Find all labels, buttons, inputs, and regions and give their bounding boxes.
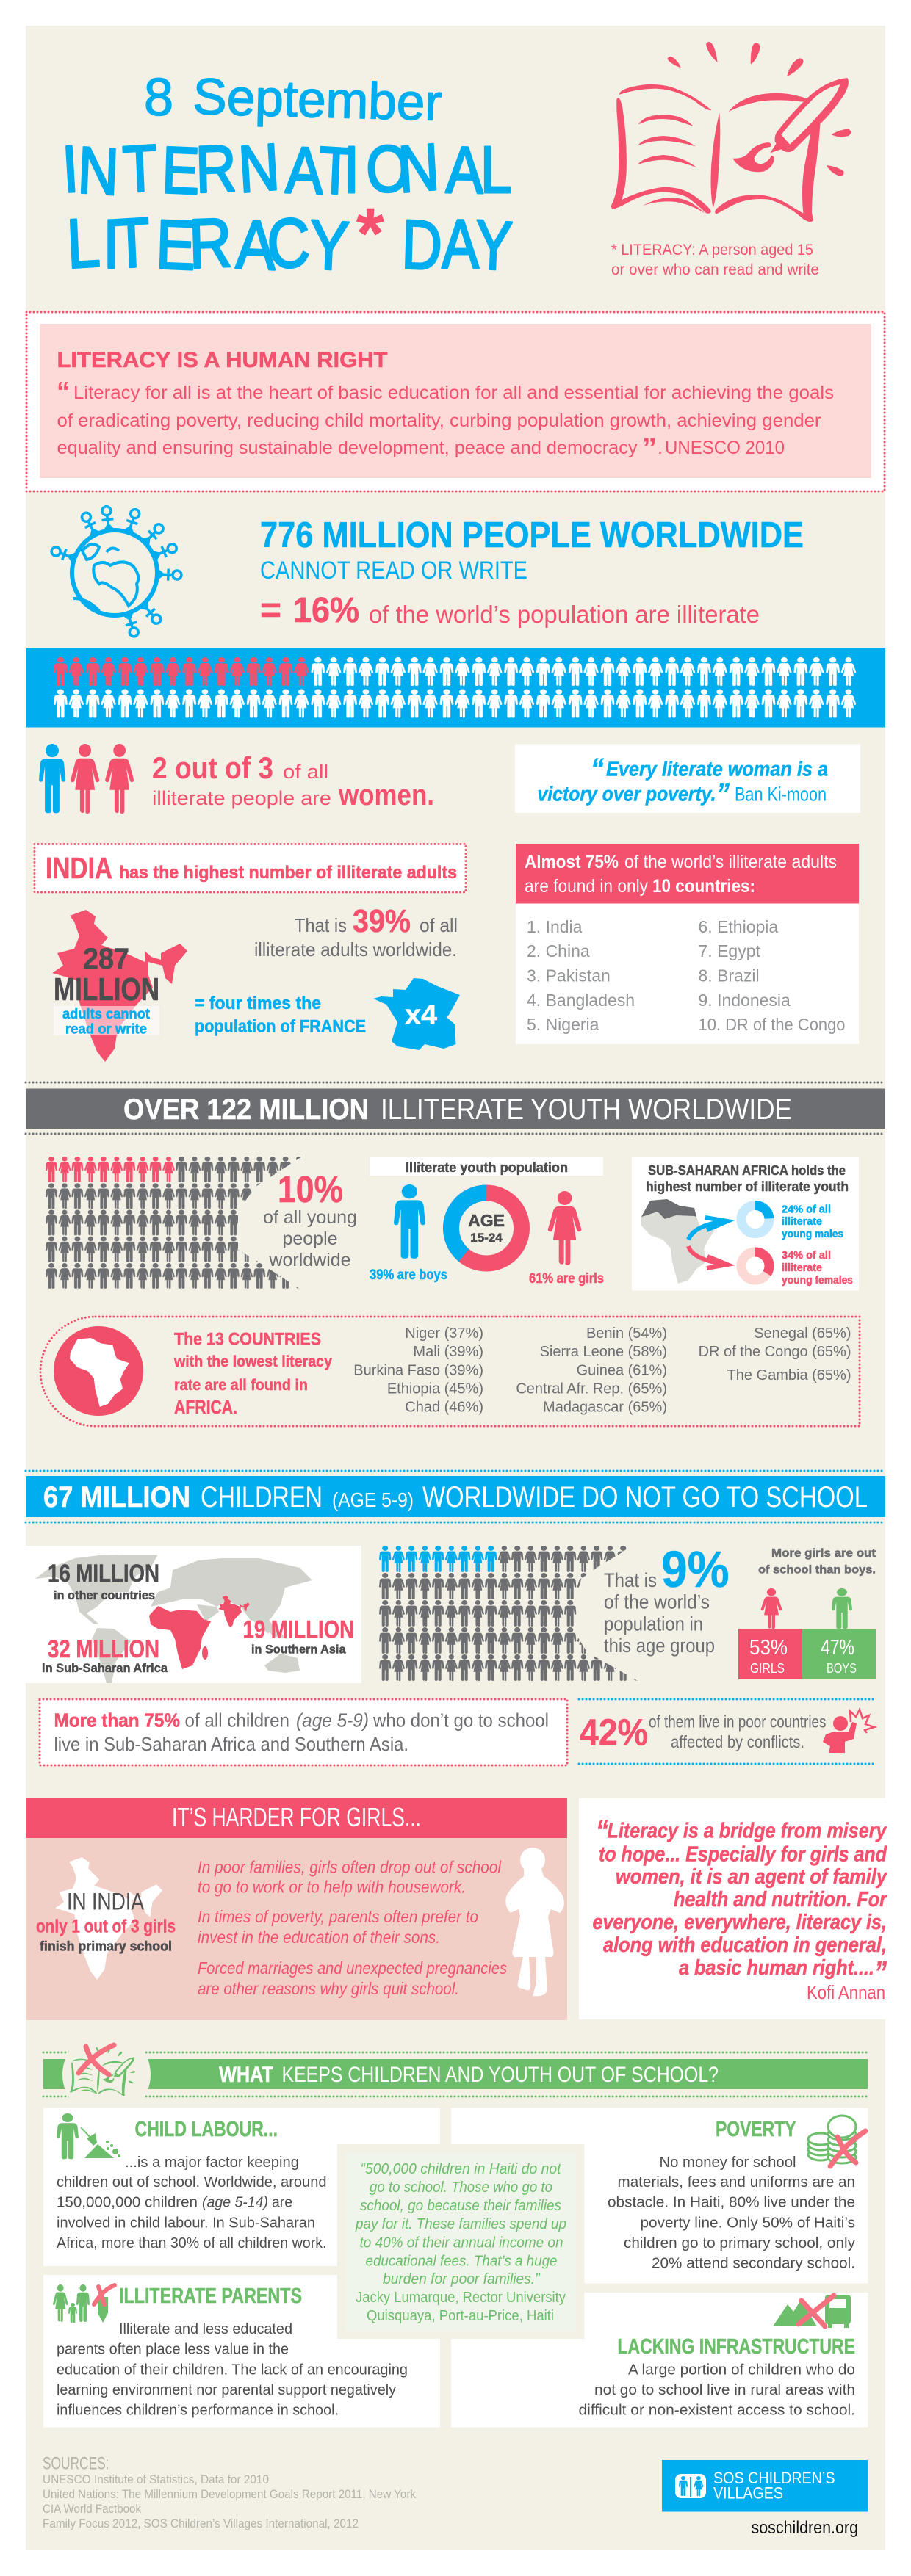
stat: 39 percent: That is <box>295 914 347 936</box>
panel heading <box>525 852 837 897</box>
sources: CIA World Factbook <box>43 2502 141 2516</box>
stat: 10 percent: of all young <box>263 1207 357 1228</box>
map labels: in Sub-Saharan Africa <box>42 1661 168 1675</box>
card text: children go to primary school, only <box>624 2235 856 2251</box>
card text: A large portion of children who do <box>628 2362 855 2378</box>
title: 8 September International Literacy Day: DAY <box>400 206 514 286</box>
card text: difficult or non-existent access to school. <box>579 2401 855 2419</box>
list: countries column 2: Sierra Leone (58%) <box>540 1344 667 1360</box>
section banner: 122 million illiterate youth <box>26 1088 885 1129</box>
callout: India highest number <box>35 844 466 892</box>
icon: boy on bar <box>832 1588 852 1629</box>
card text: poverty line. Only 50% of Haiti’s <box>641 2215 855 2231</box>
card text: 20% attend secondary school. <box>652 2254 855 2272</box>
asterisk: * <box>356 193 384 273</box>
list: countries column 3: The Gambia (65%) <box>727 1367 851 1383</box>
card: lacking infrastructure <box>451 2293 868 2428</box>
map labels: 32 MILLION <box>48 1635 159 1663</box>
list: countries column 1: Mali (39%) <box>413 1344 483 1360</box>
panel heading: Almost 75% <box>525 852 619 872</box>
panel heading: 10 countries: <box>652 876 755 897</box>
logo: SOS Children's Villages: SOS CHILDREN’S <box>713 2469 835 2487</box>
map labels <box>42 1560 354 1675</box>
callout: India highest number: INDIA <box>46 851 112 885</box>
map: India 287 million: read or write <box>65 1022 147 1037</box>
callout: more than 75 percent: who don’t go to school <box>372 1710 549 1732</box>
panel: Haiti quote: go to school. Those who go to <box>370 2179 552 2196</box>
panel: 100 people band with 16 highlighted <box>26 648 885 727</box>
map: India 287 million: adults cannot <box>62 1007 151 1022</box>
label: young males: 24% of all <box>782 1203 831 1216</box>
sources: United Nations: The Millennium Development Goals Report 2011, New York <box>43 2487 416 2501</box>
headline: 776 million: of the world’s population are illiterate <box>369 601 760 628</box>
map labels: 16 MILLION <box>48 1560 159 1588</box>
list: countries column 3: DR of the Congo (65%) <box>699 1344 851 1360</box>
country list: 3. Pakistan <box>527 966 611 985</box>
list: countries column 2: Benin (54%) <box>586 1325 667 1342</box>
icon: girl on bar <box>761 1588 782 1629</box>
panel: literacy is a human right <box>26 312 885 491</box>
UNESCO quote: . <box>658 438 663 458</box>
list: countries column 1: Niger (37%) <box>405 1325 483 1342</box>
card: illiterate parents <box>43 2275 440 2428</box>
headline: 776 million <box>260 515 804 630</box>
card text <box>57 2154 326 2251</box>
UNESCO quote: equality and ensuring sustainable development, peace and democracy <box>57 438 638 458</box>
map: France x4: x4 <box>405 1000 437 1031</box>
stat: 2 out of 3 women: 2 out of 3 <box>152 750 273 785</box>
card text: materials, fees and uniforms are an <box>617 2174 855 2190</box>
section banner: 67 million children: CHILDREN <box>201 1481 323 1513</box>
panel: Sub-Saharan Africa <box>632 1157 859 1291</box>
card text <box>579 2362 855 2419</box>
text: the 13 countries: AFRICA. <box>174 1396 237 1418</box>
callout: 42 percent conflicts: 42% <box>580 1711 648 1754</box>
panel: Haiti quote <box>337 2144 585 2339</box>
stat: 9 percent: 9% <box>661 1541 729 1598</box>
world map land <box>35 1555 312 1683</box>
stat: 39 percent: of all <box>420 914 458 936</box>
stat: four times France: population of FRANCE <box>195 1016 366 1037</box>
callout: India highest number: has the highest number of illiterate adults <box>119 863 457 883</box>
stat: 9 percent <box>604 1541 729 1657</box>
text: the 13 countries: The 13 COUNTRIES <box>174 1329 321 1350</box>
text: in India: finish primary school <box>40 1939 172 1953</box>
icon: open book with pen <box>611 42 851 222</box>
label: young males <box>782 1203 843 1240</box>
title: 8 September International Literacy Day: September <box>192 68 443 131</box>
map: India 287 million: 287 <box>83 943 129 975</box>
card text: learning environment nor parental support negatively <box>57 2381 397 2398</box>
quote: Ban Ki-moon: Every literate woman is a <box>606 758 828 780</box>
donut: 24 percent males <box>741 1206 769 1234</box>
icon: book crossed out <box>70 2045 135 2096</box>
list: countries column 1: Burkina Faso (39%) <box>353 1363 483 1379</box>
label: young females: 34% of all <box>782 1249 831 1262</box>
text: reasons: Forced marriages and unexpected pregnancies <box>198 1958 507 1978</box>
callout: more than 75 percent <box>40 1699 567 1765</box>
pictogram: 9 percent of children <box>379 1546 647 1682</box>
map: Africa in grey <box>641 1199 715 1284</box>
card: child labour <box>43 2108 440 2266</box>
headline: 776 million: = <box>260 591 281 630</box>
card text: ...is a major factor keeping <box>125 2154 299 2171</box>
text: in India: only 1 out of 3 girls <box>36 1917 176 1937</box>
country list: 7. Egypt <box>698 941 760 960</box>
text: the 13 countries: with the lowest literacy <box>173 1353 332 1370</box>
bar: boys 47 percent: BOYS <box>827 1661 857 1676</box>
map: India white <box>55 1857 162 1980</box>
stat: four times France: = four times the <box>195 994 321 1013</box>
panel: Haiti quote: pay for it. These families spend up <box>355 2216 566 2232</box>
callout: more than 75 percent: of all children <box>185 1710 289 1732</box>
quote: Ban Ki-moon: “ <box>591 753 604 785</box>
country list: 10. DR of the Congo <box>698 1015 845 1034</box>
stat: 10 percent: people <box>282 1229 338 1249</box>
panel: Haiti quote: school, go because their families <box>360 2198 561 2214</box>
sources: UNESCO Institute of Statistics, Data for 2010 <box>43 2472 269 2486</box>
stat: 39 percent: 39% <box>353 903 411 939</box>
logo: SOS Children's Villages <box>662 2460 868 2511</box>
stat: 9 percent: That is <box>604 1569 657 1591</box>
headline: 776 million: CANNOT READ OR WRITE <box>260 557 527 585</box>
section banner: what keeps children out of school: WHAT <box>219 2063 273 2087</box>
pictogram: 10 percent of youth <box>46 1157 360 1290</box>
stat: 2 out of 3 women: illiterate people are <box>152 787 331 809</box>
map: India 287 million: MILLION <box>54 972 159 1007</box>
icon: mountain and bus crossed out <box>773 2295 851 2328</box>
text: reasons: to go to work or to help with housework. <box>198 1877 466 1896</box>
callout: 42 percent conflicts: of them live in poor countries <box>649 1712 826 1732</box>
title: 8 September International Literacy Day: 8 <box>144 68 173 127</box>
section banner: what keeps children out of school: KEEPS CHILDREN AND YOUTH OUT OF SCHOOL? <box>282 2063 719 2087</box>
icon: coins crossed out <box>808 2116 865 2166</box>
panel: Kofi Annan quote: Kofi Annan <box>807 1981 885 2003</box>
icon: family with pencil <box>53 2284 115 2323</box>
heading: literacy is a human right: LITERACY IS A HUMAN RIGHT <box>57 348 388 372</box>
stat: 9 percent: population in <box>604 1613 703 1635</box>
panel heading: of the world’s illiterate adults <box>624 852 837 872</box>
label: young males: young males <box>782 1228 843 1240</box>
panel: Sub-Saharan Africa: highest number of illiterate youth <box>646 1179 849 1194</box>
icon: SOS logo <box>675 2474 706 2498</box>
text: in India <box>36 1889 176 1953</box>
stat: 10 percent: worldwide <box>268 1250 351 1270</box>
stat: 2 out of 3 women: women. <box>338 779 434 811</box>
callout: more than 75 percent: More than 75% <box>54 1710 180 1732</box>
card text: Africa, more than 30% of all children work. <box>57 2235 326 2251</box>
label: young females: illiterate <box>782 1262 822 1274</box>
card heading: POVERTY <box>716 2118 796 2141</box>
arrow: blue <box>688 1218 727 1240</box>
stat: 10 percent: 10% <box>278 1168 343 1210</box>
panel: Haiti quote: Quisquaya, Port-au-Price, Haiti <box>367 2308 554 2324</box>
panel: more girls out of school: of school than boys. <box>758 1564 876 1576</box>
stat: 39 percent <box>254 903 458 960</box>
stat: 9 percent: of the world’s <box>604 1591 710 1613</box>
card heading: ILLITERATE PARENTS <box>119 2284 302 2308</box>
text: reasons: are other reasons why girls quit school. <box>198 1979 459 1998</box>
sources: Family Focus 2012, SOS Children’s Villages International, 2012 <box>43 2517 359 2530</box>
quote: Ban Ki-moon: victory over poverty. <box>538 783 716 805</box>
icon: boy <box>394 1184 425 1259</box>
card text <box>57 2320 408 2419</box>
list: countries column 1: Ethiopia (45%) <box>387 1381 483 1397</box>
panel: 13 countries in Africa <box>40 1317 860 1426</box>
text: reasons <box>198 1858 507 1998</box>
website: soschildren.org <box>751 2518 858 2538</box>
stat: 10 percent <box>263 1168 357 1270</box>
panel: Haiti quote: educational fees. That’s a huge <box>366 2253 557 2269</box>
country list: 9. Indonesia <box>698 991 791 1010</box>
UNESCO quote <box>57 377 834 464</box>
label: young males: illiterate <box>782 1215 822 1228</box>
card text: involved in child labour. In Sub-Saharan <box>57 2215 315 2231</box>
icon: girl silhouette <box>505 1848 564 1996</box>
icon: Africa in circle <box>54 1326 143 1416</box>
text: reasons: In poor families, girls often drop out of school <box>198 1858 502 1877</box>
donut: 34 percent females <box>741 1252 769 1280</box>
card text: children out of school. Worldwide, around <box>57 2174 326 2190</box>
list: countries column 2 <box>516 1325 667 1416</box>
sources <box>43 2454 416 2530</box>
UNESCO quote: Literacy for all is at the heart of basic education for all and essential for achieving the goals <box>73 383 834 403</box>
country list: 1. India <box>527 917 583 936</box>
panel: illiterate youth population <box>370 1157 604 1287</box>
section banner: 67 million children: (AGE 5-9) <box>332 1488 414 1511</box>
panel: Haiti quote: Jacky Lumarque, Rector University <box>356 2290 566 2306</box>
country list: 5. Nigeria <box>527 1015 599 1034</box>
card text: (age 5-14) <box>202 2194 268 2210</box>
panel: more girls out of school <box>738 1547 876 1679</box>
literacy definition: or over who can read and write <box>611 261 819 278</box>
card text: obstacle. In Haiti, 80% live under the <box>608 2194 855 2210</box>
text: the 13 countries <box>173 1329 332 1418</box>
country list: 6. Ethiopia <box>698 917 778 936</box>
Africa and India highlighted <box>149 1596 250 1669</box>
UNESCO quote: “ <box>57 377 70 408</box>
panel: Kofi Annan quote <box>579 1798 888 2019</box>
callout: more than 75 percent: (age 5-9) <box>296 1710 369 1732</box>
stat: four times France <box>195 994 366 1037</box>
country list: 4. Bangladesh <box>527 991 635 1010</box>
callout: more than 75 percent: live in Sub-Saharan Africa and Southern Asia. <box>54 1733 408 1755</box>
stat: 2 out of 3 women <box>152 750 434 811</box>
list: countries column 3 <box>699 1325 851 1383</box>
panel: Kofi Annan quote: ” <box>874 1955 887 1991</box>
UNESCO quote: of eradicating poverty, reducing child mortality, curbing population growth, achieving gender <box>57 410 821 431</box>
map labels: in other countries <box>54 1588 155 1602</box>
section banner: 67 million children <box>26 1476 885 1517</box>
card text: education of their children. The lack of an encouraging <box>57 2362 408 2378</box>
text: reasons: In times of poverty, parents often prefer to <box>198 1907 478 1926</box>
card text: 150,000,000 children <box>57 2194 198 2210</box>
panel: Haiti quote: burden for poor families.” <box>383 2271 541 2287</box>
icon: one man and two women <box>39 744 134 814</box>
donut: 39 percent boys 61 percent girls <box>436 1179 536 1278</box>
label: young females: young females <box>782 1274 853 1287</box>
donut: 39 percent boys 61 percent girls: AGE <box>468 1211 505 1230</box>
section banner: what keeps children out of school <box>43 2030 868 2119</box>
list: countries column 2: Madagascar (65%) <box>543 1400 667 1416</box>
icon: crouching person and explosion <box>823 1710 874 1753</box>
map labels: 19 MILLION <box>242 1616 354 1643</box>
world map panel <box>26 1546 361 1683</box>
text: in India: IN INDIA <box>67 1889 145 1915</box>
stat: 39 percent: illiterate adults worldwide. <box>254 938 457 960</box>
panel heading: are found in only <box>525 876 648 897</box>
panel heading: IT’S HARDER FOR GIRLS... <box>172 1802 421 1832</box>
panel: illiterate youth population: Illiterate youth population <box>406 1160 568 1175</box>
icon: child with shovel <box>57 2113 120 2159</box>
bar: boys 47 percent: 47% <box>821 1636 854 1660</box>
card text: No money for school <box>660 2154 796 2171</box>
quote: Ban Ki-moon: Ban Ki-moon <box>735 783 827 805</box>
section banner: 122 million illiterate youth: OVER 122 MILLION <box>123 1093 369 1126</box>
panel: it's harder for girls <box>26 1798 567 2020</box>
country list <box>527 917 845 1034</box>
label: girls share: 61% are girls <box>529 1271 604 1287</box>
map: India 287 million <box>52 910 187 1062</box>
card text: Illiterate and less educated <box>119 2320 292 2337</box>
callout: 42 percent conflicts <box>579 1699 874 1764</box>
stat: 9 percent: this age group <box>604 1635 715 1657</box>
card text: are <box>272 2194 292 2210</box>
logo: SOS Children's Villages: VILLAGES <box>713 2483 783 2503</box>
icon: globe with people <box>50 506 181 638</box>
literacy definition: * LITERACY: A person aged 15 <box>611 242 813 258</box>
card text: not go to school live in rural areas with <box>594 2381 855 2398</box>
UNESCO quote: UNESCO 2010 <box>665 438 785 458</box>
card text <box>608 2154 856 2272</box>
list: countries column 1 <box>353 1325 483 1416</box>
panel: Haiti quote: to 40% of their annual income on <box>360 2235 563 2251</box>
arrow: pink <box>688 1246 727 1268</box>
card heading: LACKING INFRASTRUCTURE <box>617 2335 855 2359</box>
label: young females <box>782 1249 853 1287</box>
card text: parents often place less value in the <box>57 2341 289 2357</box>
callout: 42 percent conflicts: affected by conflicts. <box>671 1732 804 1751</box>
headline: 776 million: 16% <box>293 591 359 630</box>
panel: more girls out of school: More girls are out <box>771 1547 876 1560</box>
quote: Ban Ki-moon <box>515 745 860 813</box>
country list: 8. Brazil <box>698 966 760 985</box>
country list: 2. China <box>527 941 590 960</box>
card text: influences children’s performance in school. <box>57 2401 339 2419</box>
label: boys share: 39% are boys <box>370 1267 447 1283</box>
icon: girl <box>548 1191 581 1265</box>
map labels: in Southern Asia <box>251 1642 346 1657</box>
list: countries column 1: Chad (46%) <box>405 1400 483 1416</box>
title: 8 September International Literacy Day: INTERNATIONAL <box>60 129 511 209</box>
donut: 39 percent boys 61 percent girls: 15-24 <box>470 1231 503 1245</box>
title: 8 September International Literacy Day <box>60 68 514 286</box>
section banner: 67 million children: 67 MILLION <box>43 1481 190 1513</box>
panel: top 10 countries <box>516 844 859 1044</box>
map: France x4 <box>373 978 460 1050</box>
quote: Ban Ki-moon: ” <box>716 778 730 810</box>
bar: boys 47 percent <box>802 1629 876 1679</box>
panel: Haiti quote: “500,000 children in Haiti do not <box>360 2161 562 2177</box>
sources: SOURCES: <box>43 2454 109 2473</box>
stat: 2 out of 3 women: of all <box>283 761 328 783</box>
bar: girls 53 percent <box>738 1629 802 1679</box>
section banner: 122 million illiterate youth: ILLITERATE YOUTH WORLDWIDE <box>381 1093 792 1126</box>
text: the 13 countries: rate are all found in <box>174 1377 308 1394</box>
panel: Sub-Saharan Africa: SUB-SAHARAN AFRICA holds the <box>648 1163 846 1178</box>
literacy definition <box>611 242 819 278</box>
UNESCO quote: ” <box>642 433 657 464</box>
title: 8 September International Literacy Day: LITERACY <box>65 203 350 286</box>
text: reasons: invest in the education of their sons. <box>198 1928 440 1947</box>
list: countries column 2: Central Afr. Rep. (65%) <box>516 1381 667 1397</box>
card heading: CHILD LABOUR... <box>135 2118 278 2141</box>
bar: girls 53 percent: 53% <box>749 1636 788 1660</box>
card: poverty <box>451 2108 868 2284</box>
panel: Kofi Annan quote: a basic human right.... <box>679 1956 874 1980</box>
list: countries column 3: Senegal (65%) <box>754 1325 851 1342</box>
headline: 776 million: 776 MILLION PEOPLE WORLDWIDE <box>260 515 804 555</box>
list: countries column 2: Guinea (61%) <box>577 1363 667 1379</box>
panel: Kofi Annan quote: “ <box>596 1813 608 1849</box>
bar: girls 53 percent: GIRLS <box>750 1661 785 1676</box>
